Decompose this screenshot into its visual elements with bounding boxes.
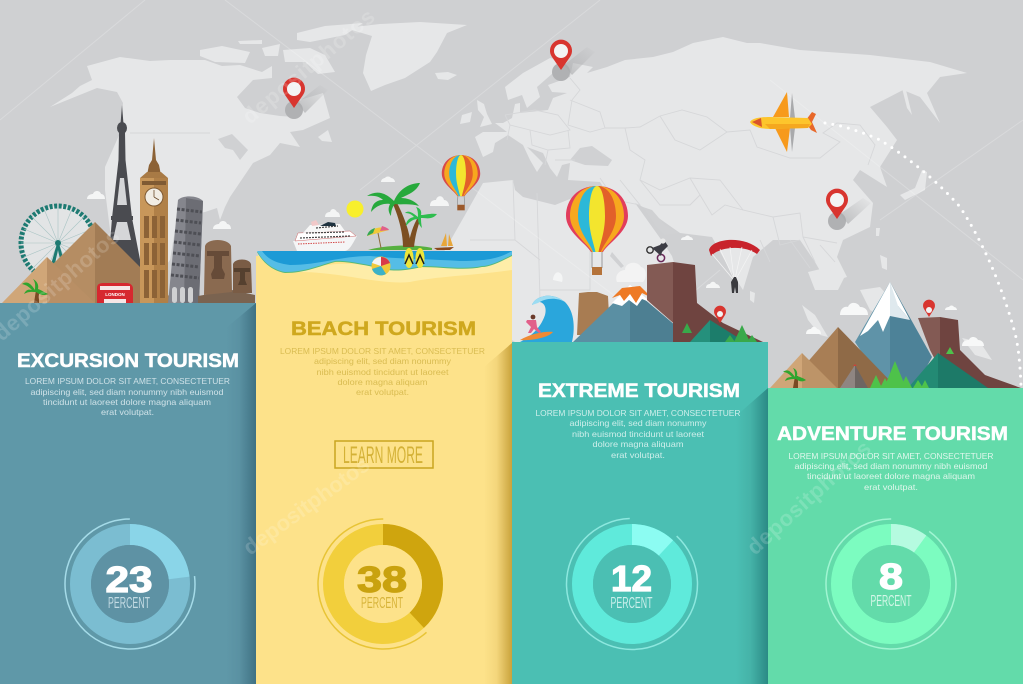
text block: beach body: LOREM IPSUM DOLOR SIT AMET, CONSECTETUER [280, 346, 485, 356]
icon: tent [840, 364, 868, 388]
donut chart: 38 percent: 38 [357, 559, 407, 600]
icon: island [368, 246, 432, 250]
text block: excursion body: LOREM IPSUM DOLOR SIT AMET, CONSECTETUER [25, 376, 230, 386]
icon: large pyramid [785, 327, 897, 388]
text block: beach body: nibh euismod tincidunt ut laoreet [316, 367, 449, 377]
heading: excursion tourism: EXCURSION TOURISM [17, 351, 239, 372]
text block: extreme body: adipiscing elit, sed diam nonummy [570, 418, 707, 428]
icon: motocross biker [647, 238, 668, 262]
pin: North America [283, 78, 328, 119]
icon: small pin [714, 306, 726, 323]
icon: cruise ship [293, 220, 357, 251]
icon: pine trees [682, 323, 757, 342]
icon: palm trees [367, 183, 437, 247]
map: Persian Gulf and Arabian Sea [643, 207, 680, 235]
icon: brown rock [577, 292, 610, 335]
icon: clouds [806, 303, 984, 346]
text block: beach body: adipiscing elit, sed diam nonummy [314, 356, 452, 366]
text block: extreme body: LOREM IPSUM DOLOR SIT AMET, CONSECTETUER [536, 408, 740, 418]
heading: beach tourism: BEACH TOURISM [291, 319, 476, 340]
icon: hot air balloon small [442, 155, 480, 210]
icon: clouds [553, 236, 720, 288]
icon: small pin [923, 300, 935, 317]
icon: London bus [97, 283, 133, 303]
donut chart: 8 percent: 8 [879, 556, 903, 597]
donut chart: 23 percent: PERCENT [108, 595, 150, 612]
text block: extreme body [536, 408, 740, 460]
icon: palm tree [783, 368, 806, 388]
text block: excursion body: erat volutpat. [101, 407, 154, 417]
text block: beach body [280, 346, 485, 397]
text block: adventure body: LOREM IPSUM DOLOR SIT AMET, CONSECTETUER [788, 451, 994, 461]
donut chart: 12 percent: PERCENT [610, 595, 653, 612]
text block: beach body: erat volutpat. [356, 387, 409, 397]
icon: sun [346, 200, 364, 218]
icon: mesa cliff [918, 317, 1021, 388]
icon: hot air balloon large [566, 186, 628, 275]
text block: adventure body [788, 451, 994, 492]
panel: extreme tourism [512, 342, 768, 684]
map: country borders [130, 78, 875, 300]
icon: green hill [908, 353, 988, 388]
map: Black Sea [570, 146, 612, 166]
smoke [616, 263, 646, 282]
icon: surfer [520, 315, 553, 340]
watermark text: depositphotos [742, 435, 876, 560]
donut chart: 8 percent [800, 493, 982, 675]
icon: wave [520, 296, 574, 342]
icon: beach umbrella [367, 226, 389, 248]
watermark text [0, 4, 876, 560]
map: North America [50, 57, 330, 300]
text block: extreme body: nibh euismod tincidunt ut laoreet [572, 429, 705, 439]
icon: large pyramid [14, 222, 176, 303]
text block: excursion body: adipiscing elit, sed diam nonummy nibh euismod [30, 387, 224, 397]
icon: Big Ben [140, 138, 168, 303]
donut chart: 12 percent: 12 [611, 558, 652, 599]
icon: Leaning Tower of Pisa [168, 196, 203, 303]
map: Scandinavia [505, 58, 567, 108]
panel: adventure tourism [768, 388, 1023, 684]
icon: airplane [750, 92, 817, 152]
pin: China [826, 189, 871, 230]
button: learn more [335, 441, 433, 469]
icon: ferris wheel [21, 206, 95, 280]
button: learn more: LEARN MORE [343, 442, 423, 469]
text block: extreme body: dolore magna aliquam [592, 439, 684, 449]
text block: adventure body: tincidunt ut laoreet dolore magna aliquam [807, 471, 975, 481]
text block: excursion body [25, 376, 230, 417]
dotted flight path [825, 123, 1021, 385]
scene: adventure mountains [770, 282, 1021, 388]
icon: clouds [325, 176, 449, 217]
text block: adventure body: erat volutpat. [864, 482, 918, 492]
sea [257, 251, 512, 273]
map: Eurasia and Africa [438, 37, 967, 345]
icon: Eiffel Tower [108, 105, 142, 270]
icon: London bus: LONDON [105, 292, 125, 297]
icon: clouds [87, 191, 231, 229]
icon: green hill [690, 320, 745, 342]
icon: small pyramid [2, 257, 95, 303]
text block: adventure body: adipiscing elit, sed diam nonummy nibh euismod [794, 461, 988, 471]
beach sand highlight [257, 254, 512, 282]
donut chart: 23 percent: 23 [106, 559, 152, 600]
map: Red Sea [610, 252, 624, 268]
icon: snowy mountain [855, 282, 932, 388]
scene: extreme sports [520, 186, 763, 342]
icon: pine trees [870, 347, 954, 388]
icon: flip flops [404, 248, 424, 268]
donut chart: 38 percent: PERCENT [361, 595, 403, 612]
icon: Easter Island moai [198, 240, 255, 303]
donut chart: 12 percent [539, 491, 725, 677]
map: Greenland [345, 22, 467, 91]
icon: beach ball [372, 256, 390, 276]
panel: excursion tourism [0, 303, 256, 684]
icon: palm tree [22, 279, 48, 303]
donut chart: 8 percent: PERCENT [870, 593, 912, 610]
text block: excursion body: tincidunt ut laoreet dolore magna aliquam [43, 397, 211, 407]
heading: extreme tourism: EXTREME TOURISM [538, 381, 740, 402]
icon: parachute [709, 240, 760, 293]
map: Great Lakes [218, 134, 248, 160]
icon: small pyramid [770, 353, 837, 388]
icon: volcano [573, 263, 695, 342]
scene: landmarks [2, 105, 255, 303]
donut chart: 38 percent [291, 492, 475, 676]
map: British Isles [460, 100, 492, 127]
icon: sailboat [434, 233, 454, 250]
scene: beach [257, 155, 512, 282]
panel: beach tourism [256, 256, 512, 684]
icon: mesa cliff [647, 262, 763, 342]
text block: extreme body: erat volutpat. [611, 450, 665, 460]
donut chart: 23 percent [58, 512, 202, 656]
heading: adventure tourism: ADVENTURE TOURISM [777, 424, 1008, 445]
pin: Scandinavia [550, 40, 595, 81]
watermark text: depositphotos [238, 452, 374, 560]
map: Iceland [435, 72, 457, 80]
text block: beach body: dolore magna aliquam [338, 377, 428, 387]
watermark text: depositphotos [237, 4, 380, 129]
map: islands of Asia [750, 80, 992, 360]
map: Arctic islands [200, 23, 363, 142]
